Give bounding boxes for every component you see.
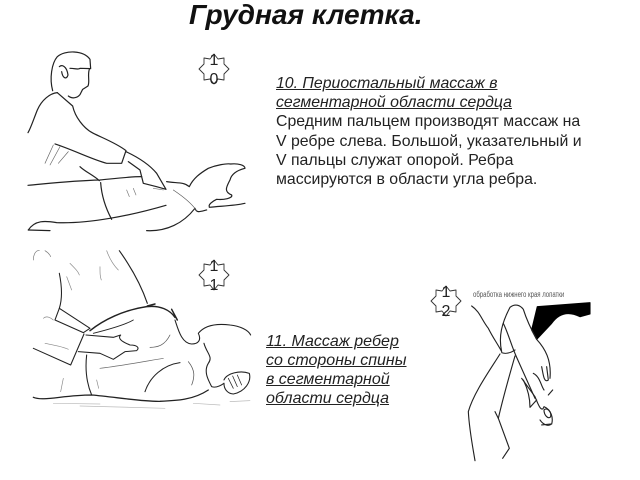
text block: step 11 description: [266, 333, 406, 407]
badge: number 11: [199, 258, 229, 294]
badge: number 10: 1: [210, 52, 219, 69]
caption: illustration 12: обработка нижнего края лопатки: [473, 290, 564, 299]
text block: step 10 description: Средним пальцем производят массаж на: [276, 113, 580, 130]
text block: step 11 description: области сердца: [266, 390, 389, 407]
badge: number 12: 1: [442, 284, 451, 301]
text block: step 10 description: 10. Периостальный массаж в: [276, 75, 498, 92]
illustration: lower scapula edge treatment: [468, 303, 590, 461]
badge: number 10: [199, 52, 229, 88]
text block: step 11 description: в сегментарной: [266, 371, 390, 388]
badge: number 11: 1: [210, 277, 219, 294]
text block: step 10 description: массируются в области угла ребра.: [276, 171, 537, 188]
text block: step 10 description: сегментарной области сердца: [276, 94, 512, 111]
text block: step 11 description: со стороны спины: [266, 352, 406, 369]
badge: number 11: 1: [210, 258, 219, 275]
badge: number 12: 2: [442, 303, 451, 320]
illustration: chest massage on a lying patient: [28, 52, 245, 231]
badge: number 10: 0: [210, 71, 219, 88]
text block: step 11 description: 11. Массаж ребер: [266, 333, 399, 350]
text block: step 10 description: [276, 75, 582, 188]
badge: number 12: [431, 284, 461, 320]
illustration: rib massage from the back: [33, 251, 251, 408]
text block: step 10 description: V ребре слева. Большой, указательный и: [276, 133, 582, 150]
text block: step 10 description: V пальцы служат опорой. Ребра: [276, 152, 513, 169]
black shoulder shape: [532, 303, 590, 339]
